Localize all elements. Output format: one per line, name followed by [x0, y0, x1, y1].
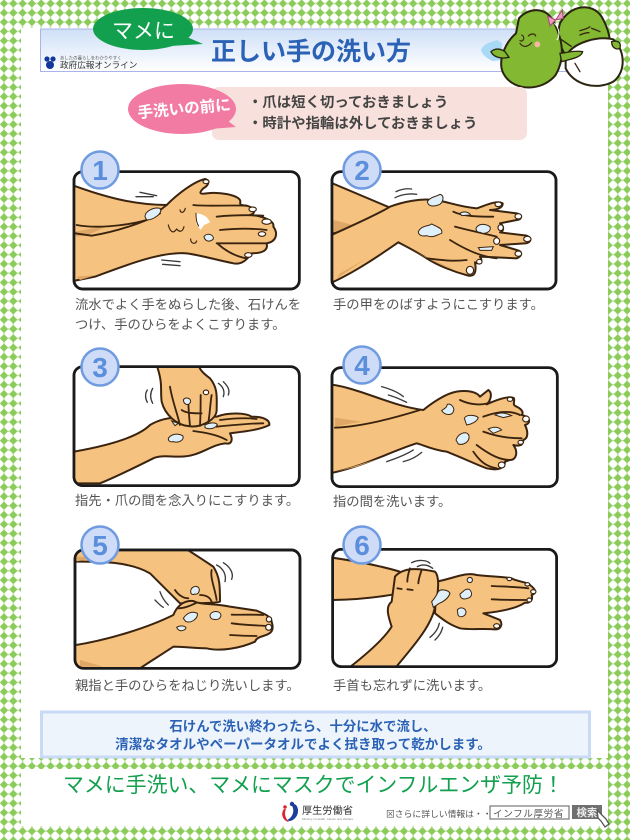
number 4: 4 [354, 350, 370, 381]
caption 4: 指の間を洗います。 [333, 494, 451, 509]
number 2: 2 [354, 155, 370, 186]
search prompt: ⊠さらに詳しい情報は・・ [386, 808, 492, 819]
mascot: masked bean [558, 7, 623, 86]
pink bubble: 手洗いの前に [137, 95, 232, 122]
step 5 [70, 526, 300, 693]
step 2 [330, 152, 556, 312]
pre-wash note [128, 84, 527, 140]
note lines: ・爪は短く切っておきましょう [248, 93, 448, 111]
government logo: 政府広報オンライン [60, 59, 137, 70]
search button: 検索 [576, 806, 598, 819]
caption 6: 手首も忘れずに洗います。 [333, 678, 491, 693]
number 3 [82, 348, 118, 386]
illustration: twisting thumb [70, 548, 300, 668]
number 3: 3 [92, 352, 108, 383]
step 6 [330, 526, 557, 693]
number 6 [344, 526, 380, 564]
number 5 [82, 526, 118, 564]
closing note panel: 石けんで洗い終わったら、十分に水で流し、 [169, 718, 437, 734]
step 1 [70, 152, 301, 332]
title: 正しい手の洗い方 [211, 38, 411, 66]
number 5: 5 [92, 530, 108, 561]
number 2 [344, 152, 380, 188]
step 4 [330, 346, 557, 509]
illustration: between fingers [330, 368, 557, 487]
closing note panel [42, 712, 590, 757]
header band [40, 29, 570, 72]
illustration: wrists [330, 549, 557, 668]
cursor icon [597, 810, 609, 827]
illustration: fingertips on palm [70, 365, 299, 486]
government logo [44, 54, 137, 70]
search box: インフル厚労省 [493, 808, 564, 820]
ministry logo [282, 802, 353, 822]
closing note panel: 清潔なタオルやペーパータオルでよく拭き取って乾かします。 [115, 736, 491, 752]
footer panel [21, 769, 609, 827]
pre-wash note: ・時計や指輪は外しておきましょう [248, 114, 477, 132]
footer slogan: マメに手洗い、マメにマスクでインフルエンザ予防！ [63, 774, 564, 797]
illustration: rubbing palms [70, 172, 299, 289]
pink bubble [128, 84, 236, 134]
number 6: 6 [354, 530, 370, 561]
caption 3: 指先・爪の間を念入りにこすります。 [75, 493, 299, 508]
government logo: あしたの暮らしをわかりやすく [60, 54, 121, 62]
green speech bubble: マメに [112, 20, 175, 43]
caption 1: 流水でよく手をぬらした後、石けんを [75, 297, 301, 312]
mascot: bean with bow [491, 10, 583, 87]
caption 5: 親指と手のひらをねじり洗いします。 [75, 678, 300, 693]
caption 1: つけ、手のひらをよくこすります。 [75, 317, 286, 332]
mascots [491, 7, 623, 87]
number 1: 1 [92, 155, 108, 186]
number 4 [344, 346, 380, 384]
number 1 [82, 152, 118, 188]
ministry logo: 厚生労働省 [302, 804, 353, 817]
search button [572, 805, 602, 819]
water splash [481, 40, 502, 61]
green speech bubble [93, 8, 203, 50]
step 3 [70, 348, 299, 508]
illustration: back of hand [330, 172, 556, 289]
caption 2: 手の甲をのばすようにこすります。 [333, 297, 544, 312]
ministry logo: Ministry of Health, Labour and Welfare [302, 817, 353, 821]
